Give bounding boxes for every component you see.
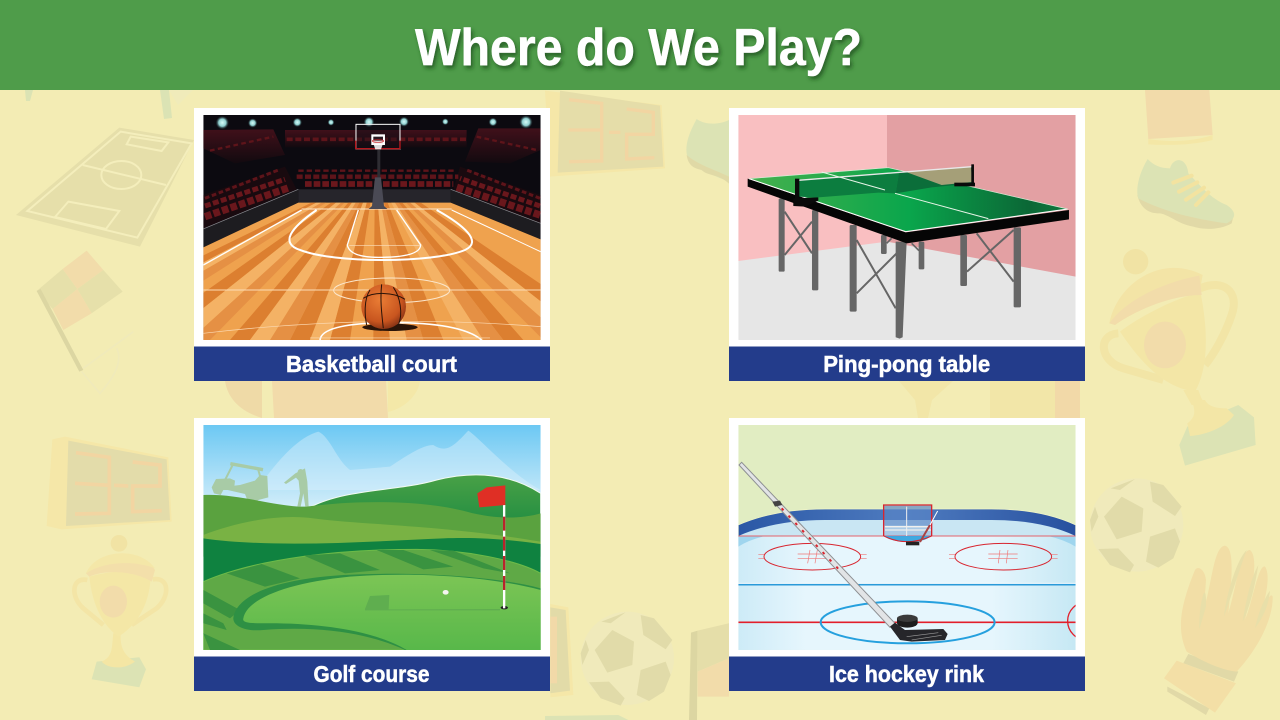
goal xyxy=(884,505,938,545)
striped fairway xyxy=(203,549,541,650)
table side xyxy=(748,179,1069,243)
ball and hole xyxy=(443,590,449,595)
icon: goalkeeper glove xyxy=(1164,546,1273,715)
illustration: hockey rink xyxy=(738,425,1106,650)
label: golf course xyxy=(194,656,550,691)
hockey stick xyxy=(739,462,948,642)
panel: basketball court xyxy=(194,108,550,381)
icon: boot top xyxy=(686,119,729,184)
court lines xyxy=(203,209,541,340)
rear legs xyxy=(881,235,924,269)
illustration: golf green xyxy=(203,425,541,650)
flag xyxy=(477,485,505,608)
icon: scoreboard left xyxy=(47,437,172,529)
icon: trophy left xyxy=(74,535,166,687)
far hill xyxy=(310,475,541,550)
header banner xyxy=(0,0,1280,90)
dark band xyxy=(203,538,541,650)
label: basketball court: Basketball court xyxy=(286,351,457,377)
shadow of flag xyxy=(365,595,500,610)
icon: sock top right xyxy=(1145,90,1213,145)
face-off circles xyxy=(758,543,1058,570)
icon: football pitch xyxy=(16,128,194,247)
label: ping-pong table xyxy=(729,346,1085,381)
label: ice hockey rink: Ice hockey rink xyxy=(829,661,984,687)
icon: trophy base right xyxy=(1179,400,1256,466)
label: golf course: Golf course xyxy=(314,661,430,687)
lights xyxy=(216,115,533,129)
icon: scoreboard top xyxy=(545,91,665,177)
panel: golf course xyxy=(194,418,550,691)
icon: corner flag xyxy=(37,251,133,393)
icon: socks behind the left cards xyxy=(225,381,1080,418)
title: Where do We Play? xyxy=(415,19,862,77)
rink lines xyxy=(738,582,1076,584)
green xyxy=(233,574,541,650)
panel: ping-pong table xyxy=(729,108,1085,381)
hoop and stand xyxy=(356,124,400,209)
basketball xyxy=(361,284,418,331)
net xyxy=(793,164,975,207)
icon: trophy right xyxy=(1104,249,1234,405)
illustration: table tennis table xyxy=(738,115,1076,340)
label: basketball court xyxy=(194,346,550,381)
floor planks xyxy=(203,202,541,340)
label: ice hockey rink xyxy=(729,656,1085,691)
label: ping-pong table: Ping-pong table xyxy=(823,351,990,377)
silhouettes xyxy=(212,462,309,507)
icon: football right xyxy=(1090,478,1183,572)
puck xyxy=(897,615,918,628)
mid hills xyxy=(203,495,541,557)
icon: top flag poles xyxy=(25,90,193,119)
table top xyxy=(749,168,1068,232)
icon: football centre xyxy=(581,612,674,706)
panel: ice hockey rink xyxy=(729,418,1106,691)
icon: football boot right xyxy=(1137,159,1234,229)
illustration: basketball arena xyxy=(203,115,541,340)
table legs xyxy=(779,198,1021,339)
icon: bottom flag and scoreboard edges xyxy=(545,604,729,720)
